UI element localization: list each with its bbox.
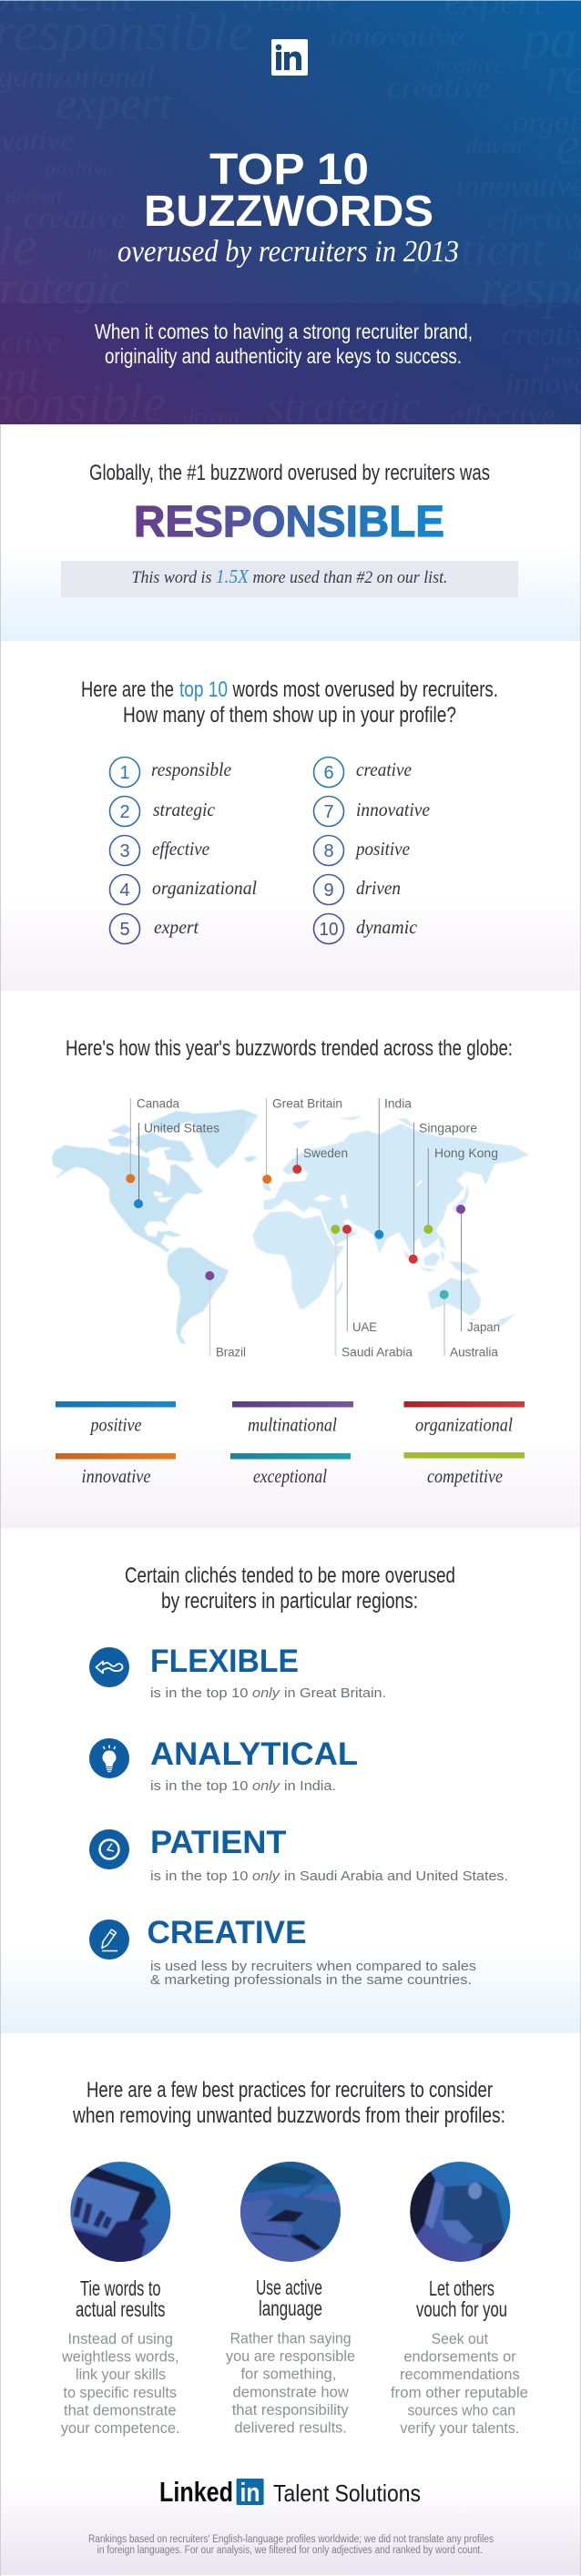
photo: hand writing — [240, 2158, 343, 2262]
pin: UAE — [342, 1225, 377, 1334]
list item 4: 4 — [119, 881, 130, 901]
heading: certain cliches: by recruiters in particular regions: — [161, 1589, 418, 1614]
heading: top 10 words: How many of them show up in your profile? — [123, 703, 456, 728]
heading: certain cliches: Certain clichés tended to be more overused — [125, 1563, 455, 1588]
pin: United States — [134, 1120, 219, 1208]
column: use active language: Use active — [256, 2276, 322, 2299]
column: use active language: for something, — [240, 2366, 336, 2382]
header panel: positive — [433, 55, 504, 78]
list item 1 — [109, 758, 231, 787]
logo: LinkedIn Talent Solutions — [159, 2476, 421, 2508]
legend: positive: positive — [89, 1413, 142, 1435]
icon: analytical light bulb — [89, 1738, 129, 1778]
pin: UAE: UAE — [352, 1319, 377, 1334]
list item 4: organizational — [152, 877, 257, 899]
pin: Australia: Australia — [450, 1345, 498, 1359]
word: flexible: is in the top 10 — [150, 1685, 248, 1701]
list item 9: driven — [356, 877, 401, 899]
pin: Saudi Arabia: Saudi Arabia — [341, 1345, 413, 1359]
word: patient: is in the top 10 — [150, 1868, 248, 1884]
column: tie words to results: link your skills — [76, 2366, 166, 2383]
pin: Sweden: Sweden — [303, 1145, 348, 1160]
header panel: driven — [183, 405, 239, 429]
callout: 1.5x more used — [61, 561, 518, 597]
panel: regional cliches — [0, 1563, 581, 2033]
icon: patient clock — [89, 1829, 129, 1869]
logo: LinkedIn Talent Solutions: Talent Solutions — [273, 2479, 421, 2507]
list item 8 — [313, 836, 410, 865]
heading: top 10 words: top 10 — [179, 677, 228, 702]
logo: LinkedIn Talent Solutions: Linked — [159, 2476, 233, 2508]
word: patient: PATIENT — [150, 1825, 286, 1860]
list item 2: strategic — [153, 799, 216, 820]
legend: multinational — [232, 1401, 353, 1435]
column: tie words to results: your competence. — [61, 2419, 180, 2437]
word: flexible — [150, 1644, 386, 1701]
header panel: creative — [24, 201, 126, 235]
panel: best practices — [0, 2078, 581, 2575]
world map — [52, 1109, 530, 1344]
column: use active language: demonstrate how — [233, 2384, 350, 2400]
pin: Brazil: Brazil — [216, 1345, 246, 1359]
word: analytical: only — [252, 1778, 281, 1794]
word: creative: is used less by recruiters when compared to sales — [150, 1959, 476, 1974]
callout: 1.5x more used: 1.5X — [216, 565, 250, 587]
pin: Brazil — [205, 1271, 246, 1359]
header panel: creative — [387, 71, 491, 105]
column: let others vouch: recommendations — [400, 2366, 520, 2383]
column: tie words to results — [61, 2276, 180, 2437]
list item 1: responsible — [151, 759, 231, 780]
legend: innovative — [56, 1453, 176, 1487]
footnote: Rankings based on recruiters' English-language profiles worldwide; we did not translate any profiles — [88, 2534, 494, 2545]
column: let others vouch: from other reputable — [391, 2384, 528, 2401]
word: analytical — [150, 1736, 358, 1794]
pin: Japan — [456, 1205, 500, 1334]
column: tie words to results: actual results — [76, 2297, 166, 2321]
legend: positive — [56, 1401, 176, 1435]
list item 5: expert — [154, 916, 199, 938]
panel: global trends — [0, 1036, 581, 1528]
callout: 1.5x more used: more used than #2 on our list. — [253, 568, 448, 587]
list item 10: dynamic — [356, 916, 418, 938]
word: analytical: ANALYTICAL — [150, 1736, 358, 1772]
header panel: patient — [411, 223, 545, 274]
list item 2: 2 — [119, 802, 130, 822]
pin: Singapore — [409, 1120, 477, 1264]
word: patient — [150, 1825, 508, 1884]
intro text: When it comes to having a strong recruiter brand, — [95, 320, 473, 343]
photo: handshake — [407, 2162, 513, 2262]
list item 8: positive — [354, 838, 410, 860]
list item 7 — [313, 796, 430, 827]
header panel — [0, 0, 581, 433]
header panel: positive — [43, 158, 113, 181]
list item 10 — [313, 914, 418, 943]
footnote: in foreign languages. For our analysis, we filtered for only adjectives and ranked by word count. — [97, 2545, 483, 2556]
legend: organizational — [404, 1401, 525, 1435]
pin: Hong Kong: Hong Kong — [434, 1145, 498, 1160]
word: flexible: in Great Britain. — [284, 1685, 386, 1701]
word: creative: CREATIVE — [148, 1915, 306, 1950]
heading: best practices — [72, 2078, 505, 2128]
icon: flexible arrow — [89, 1647, 129, 1687]
header panel: driven — [466, 135, 522, 158]
word: analytical: in India. — [284, 1778, 336, 1794]
list item 7: innovative — [356, 799, 430, 820]
column: tie words to results: Instead of using — [67, 2330, 173, 2347]
header panel: responsible — [0, 2, 253, 62]
header panel: innovative — [86, 241, 177, 265]
word: patient: in Saudi Arabia and United States. — [284, 1868, 508, 1884]
list item 1: 1 — [119, 763, 130, 783]
pin: Canada: Canada — [137, 1096, 179, 1111]
column: tie words to results: to specific results — [64, 2384, 177, 2401]
pin: Sweden — [292, 1145, 348, 1174]
column: use active language — [226, 2276, 355, 2437]
legend: organizational: organizational — [415, 1413, 513, 1435]
column: use active language: delivered results. — [235, 2418, 347, 2437]
header panel: effective — [450, 399, 556, 433]
list item 5: 5 — [119, 920, 130, 940]
column: let others vouch: Let others — [429, 2276, 494, 2300]
pin: Hong Kong — [423, 1145, 498, 1234]
word: flexible: only — [252, 1685, 281, 1701]
pin: United States: United States — [144, 1120, 219, 1135]
pin: Canada — [126, 1096, 179, 1183]
list item 5 — [109, 914, 199, 943]
legend: exceptional: exceptional — [253, 1465, 327, 1487]
icon: LinkedIn logo — [271, 39, 308, 76]
list item 3 — [109, 836, 209, 865]
word: flexible: FLEXIBLE — [150, 1644, 299, 1679]
list item 4 — [109, 874, 257, 905]
legend: exceptional — [230, 1453, 351, 1487]
heading: top 10 words: Here are the — [81, 677, 174, 702]
list item 8: 8 — [323, 841, 334, 861]
pin: Singapore: Singapore — [419, 1120, 477, 1135]
header panel: strategic — [267, 381, 421, 432]
pin: Australia — [440, 1290, 498, 1359]
big word: responsible: RESPONSIBLE — [134, 498, 444, 546]
list item 10: 10 — [319, 920, 339, 940]
legend: multinational: multinational — [248, 1413, 337, 1435]
pin: Saudi Arabia — [331, 1225, 413, 1359]
column: let others vouch: Seek out — [432, 2330, 488, 2347]
column: tie words to results: weightless words, — [61, 2347, 179, 2366]
word: analytical: is in the top 10 — [150, 1778, 248, 1794]
list item 9: 9 — [323, 881, 334, 901]
word: creative: & marketing professionals in the same countries. — [150, 1972, 472, 1988]
list item 3: effective — [152, 838, 209, 860]
column: let others vouch: vouch for you — [416, 2297, 507, 2321]
heading: top 10 words: words most overused by recruiters. — [232, 677, 498, 702]
list item 2 — [109, 796, 216, 827]
heading: certain cliches — [125, 1563, 455, 1614]
list item 6: creative — [356, 759, 412, 780]
column: use active language: you are responsible — [226, 2347, 355, 2365]
icon: creative pencil — [89, 1919, 129, 1960]
intro text: originality and authenticity are keys to success. — [105, 344, 462, 368]
legend: competitive: competitive — [427, 1465, 503, 1487]
column: let others vouch — [391, 2276, 528, 2437]
list item 9 — [313, 874, 401, 905]
pin: India — [374, 1096, 412, 1239]
list item 7: 7 — [323, 802, 334, 822]
header panel: expert — [56, 77, 173, 128]
callout: 1.5x more used: This word is — [131, 568, 211, 587]
logo: LinkedIn Talent Solutions: in — [240, 2479, 260, 2508]
panel: number one buzzword — [0, 461, 581, 641]
subtitle: overused by recruiters in 2013 — [117, 235, 459, 269]
pin: India: India — [384, 1096, 412, 1111]
header panel: innovative — [455, 169, 581, 203]
legend: competitive — [404, 1452, 525, 1487]
pin: Great Britain: Great Britain — [272, 1096, 342, 1111]
title: TOP 10 — [209, 146, 369, 194]
footnote — [88, 2534, 494, 2556]
word: creative — [148, 1915, 476, 1988]
column: let others vouch: verify your talents. — [400, 2419, 519, 2437]
heading: top 10 words — [81, 677, 498, 728]
column: let others vouch: sources who can — [408, 2402, 515, 2418]
photo: hand holding tablet — [70, 2162, 170, 2265]
pin: Japan: Japan — [467, 1319, 500, 1334]
column: use active language: language — [259, 2296, 322, 2320]
column: tie words to results: that demonstrate — [64, 2402, 177, 2418]
header panel: innovative — [329, 19, 464, 52]
list item 6: 6 — [323, 763, 334, 783]
panel: top 10 list — [0, 677, 581, 991]
list item 3: 3 — [119, 841, 130, 861]
list item 6 — [313, 758, 412, 787]
word: patient: only — [252, 1868, 281, 1884]
intro text — [95, 320, 473, 368]
title — [144, 146, 433, 236]
header panel: driven — [5, 185, 61, 209]
column: let others vouch: endorsements or — [403, 2347, 516, 2366]
title: BUZZWORDS — [144, 188, 433, 236]
legend: innovative: innovative — [82, 1465, 151, 1487]
column: use active language: Rather than saying — [230, 2329, 352, 2347]
column: use active language: that responsibility — [232, 2401, 349, 2418]
column: tie words to results: Tie words to — [80, 2276, 160, 2300]
pin: Great Britain — [262, 1096, 342, 1184]
